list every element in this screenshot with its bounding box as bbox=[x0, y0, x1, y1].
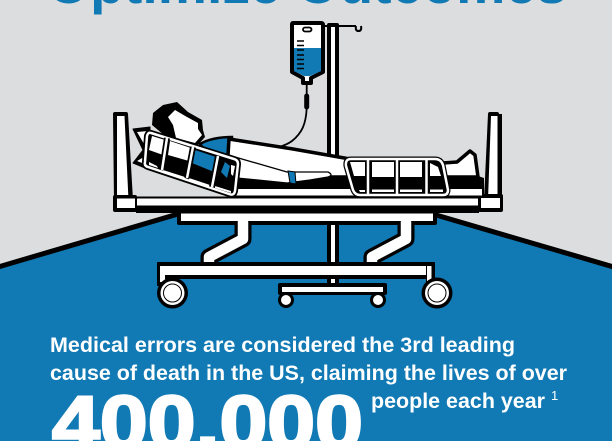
lower left arm bbox=[209, 222, 243, 266]
small base cart bbox=[278, 283, 387, 308]
patient arm bbox=[235, 157, 331, 183]
head bed rail bbox=[145, 133, 238, 195]
lower frame and wheels bbox=[157, 262, 452, 308]
patient bbox=[152, 102, 478, 184]
patient legs bbox=[228, 139, 478, 177]
pillow bbox=[133, 127, 150, 170]
wristband bbox=[288, 171, 296, 184]
foot bed rail bbox=[346, 159, 448, 195]
patient face bbox=[168, 110, 202, 143]
patient shirt bbox=[200, 137, 236, 178]
blue floor panel bbox=[0, 214, 612, 441]
IV tube bbox=[255, 82, 307, 152]
bed footboard post bbox=[484, 112, 502, 200]
bed headboard post bbox=[113, 112, 133, 200]
lower right arm bbox=[372, 222, 406, 266]
patient hair bbox=[152, 102, 205, 146]
statement text bbox=[50, 334, 567, 385]
statement text: cause of death in the US, claiming the lives of over bbox=[50, 362, 567, 385]
IV bag bbox=[292, 23, 328, 83]
mattress bbox=[146, 165, 484, 197]
people each year: people each year bbox=[371, 390, 545, 413]
people each year: 1 bbox=[551, 388, 558, 403]
bed frame bbox=[113, 194, 503, 225]
IV stand bbox=[327, 23, 361, 287]
statement text: Medical errors are considered the 3rd leading bbox=[50, 334, 515, 357]
